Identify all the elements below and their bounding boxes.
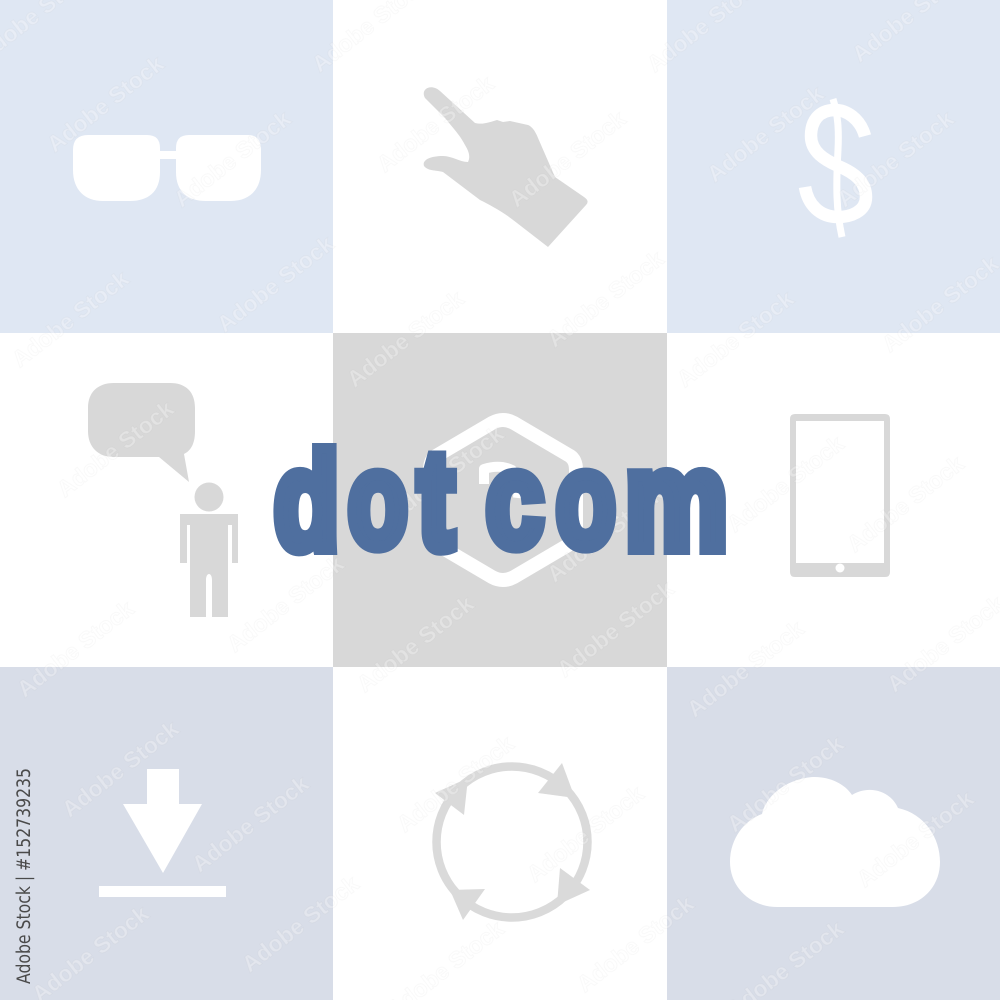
icon: download xyxy=(99,769,226,897)
icon: cloud xyxy=(730,777,940,907)
watermarks: Adobe Stock xyxy=(222,550,349,657)
watermarks: Adobe Stock xyxy=(702,80,829,187)
icon: person with speech bubble xyxy=(88,383,238,617)
watermarks: Adobe Stock xyxy=(542,480,669,587)
icon: center hexagon xyxy=(430,420,576,580)
title: c xyxy=(486,424,544,575)
icon: pointing hand xyxy=(424,87,588,247)
watermarks: Adobe Stock xyxy=(382,420,509,527)
watermarks: Adobe Stock xyxy=(832,105,959,212)
title xyxy=(273,443,726,556)
stock id text: Adobe Stock | #152739235 xyxy=(14,768,35,984)
watermarks: Adobe Stock xyxy=(7,265,134,372)
watermarks: Adobe Stock xyxy=(877,250,1000,357)
tile: cloud background xyxy=(667,667,1000,1000)
title: o xyxy=(348,424,408,575)
icon: tablet xyxy=(790,414,890,577)
watermarks: Adobe Stock xyxy=(504,105,631,212)
tile: dollar background xyxy=(667,0,1000,333)
watermarks: Adobe Stock xyxy=(522,780,649,887)
watermarks: Adobe Stock xyxy=(722,730,849,837)
title: m xyxy=(625,422,728,578)
watermarks: Adobe Stock xyxy=(842,450,969,557)
watermarks: Adobe Stock xyxy=(672,285,799,392)
watermarks: Adobe Stock xyxy=(237,870,364,977)
icon: dollar sign xyxy=(805,99,866,237)
watermarks: Adobe Stock xyxy=(722,430,849,537)
speech bubble xyxy=(88,383,195,482)
title: d xyxy=(274,422,339,578)
watermarks: Adobe Stock xyxy=(352,590,479,697)
icon: cycle arrows xyxy=(435,763,590,920)
watermarks: Adobe Stock xyxy=(392,730,519,837)
watermarks: Adobe Stock xyxy=(12,595,139,702)
tile: glasses background xyxy=(0,0,333,333)
watermarks: Adobe Stock xyxy=(572,890,699,997)
watermarks: Adobe Stock xyxy=(212,230,339,337)
watermarks: Adobe Stock xyxy=(187,770,314,877)
tile: center background xyxy=(333,333,667,667)
watermarks: Adobe Stock xyxy=(372,70,499,177)
watermarks: Adobe Stock xyxy=(57,715,184,822)
watermarks: Adobe Stock xyxy=(682,615,809,722)
watermarks: Adobe Stock xyxy=(169,105,296,212)
title: t xyxy=(418,422,454,578)
watermarks: Adobe Stock xyxy=(42,50,169,157)
title: o xyxy=(556,424,616,575)
watermarks: Adobe Stock xyxy=(52,395,179,502)
watermarks: Adobe Stock xyxy=(542,245,669,352)
tile: download background xyxy=(0,667,333,1000)
watermarks: Adobe Stock xyxy=(342,285,469,392)
watermarks: Adobe Stock xyxy=(852,785,979,892)
watermarks: Adobe Stock xyxy=(552,575,679,682)
icon: glasses xyxy=(73,135,261,201)
person xyxy=(180,483,238,617)
